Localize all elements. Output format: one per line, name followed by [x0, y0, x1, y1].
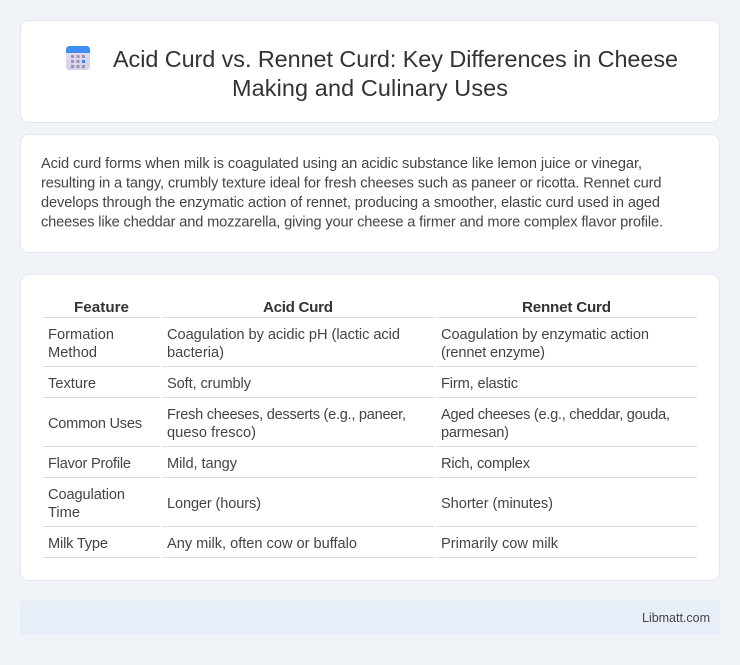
- icon: calendar: [66, 46, 90, 70]
- panel: summary: [20, 134, 720, 252]
- text block: summary: cheeses like cheddar and mozzarella, giving your cheese a firmer and more complex flavor profile.: [41, 214, 663, 230]
- row: coagulation time: Time: [48, 505, 80, 521]
- footer: [20, 601, 720, 635]
- row: milk type: Any milk, often cow or buffalo: [167, 536, 357, 552]
- row: milk type: [48, 536, 559, 552]
- row: formation method: Coagulation by acidic pH (lactic acid: [167, 327, 400, 343]
- title: Acid Curd vs. Rennet Curd: Key Differences in Cheese: [113, 46, 678, 72]
- row: flavor profile: Rich, complex: [441, 456, 531, 472]
- row: formation method: (rennet enzyme): [441, 345, 545, 361]
- text block: summary: Acid curd forms when milk is coagulated using an acidic substance like lemon juice or vinegar,: [41, 156, 642, 172]
- table header: Acid Curd: [263, 299, 333, 316]
- table header: [74, 299, 611, 316]
- title: Making and Culinary Uses: [232, 75, 508, 101]
- panel: comparison table: [20, 274, 720, 580]
- row: texture: [48, 376, 518, 392]
- table rules: [43, 317, 697, 558]
- row: common uses: queso fresco): [167, 425, 256, 441]
- row: common uses: parmesan): [441, 425, 509, 441]
- title: [113, 46, 678, 101]
- row: texture: Soft, crumbly: [167, 376, 252, 392]
- row: common uses: Common Uses: [48, 416, 142, 432]
- panel: title card: [20, 20, 720, 122]
- row: formation method: Method: [48, 345, 97, 361]
- row: texture: Texture: [48, 376, 96, 392]
- row: texture: Firm, elastic: [441, 376, 518, 392]
- text block: summary: [41, 156, 663, 230]
- row: milk type: Milk Type: [48, 536, 108, 552]
- table header: Rennet Curd: [522, 299, 611, 316]
- row: milk type: Primarily cow milk: [441, 536, 559, 552]
- row: flavor profile: Mild, tangy: [167, 456, 238, 472]
- row: flavor profile: [48, 456, 531, 472]
- row: common uses: [48, 407, 670, 441]
- footer credit: Libmatt.com: [642, 611, 710, 625]
- row: coagulation time: Shorter (minutes): [441, 496, 553, 512]
- row: formation method: [48, 327, 649, 361]
- row: coagulation time: Coagulation: [48, 487, 125, 503]
- table header: Feature: [74, 299, 129, 316]
- text block: summary: develops through the enzymatic action of rennet, producing a smoother, elastic curd used in aged: [41, 195, 660, 211]
- row: formation method: bacteria): [167, 345, 224, 361]
- row: formation method: Formation: [48, 327, 114, 343]
- row: coagulation time: Longer (hours): [167, 496, 261, 512]
- row: common uses: Aged cheeses (e.g., cheddar, gouda,: [441, 407, 670, 423]
- row: coagulation time: [48, 487, 553, 521]
- row: common uses: Fresh cheeses, desserts (e.g., paneer,: [167, 407, 406, 423]
- text block: summary: resulting in a tangy, crumbly texture ideal for fresh cheeses such as paneer or ricotta. Rennet curd: [41, 176, 662, 192]
- row: formation method: Coagulation by enzymatic action: [441, 327, 649, 343]
- row: flavor profile: Flavor Profile: [48, 456, 131, 472]
